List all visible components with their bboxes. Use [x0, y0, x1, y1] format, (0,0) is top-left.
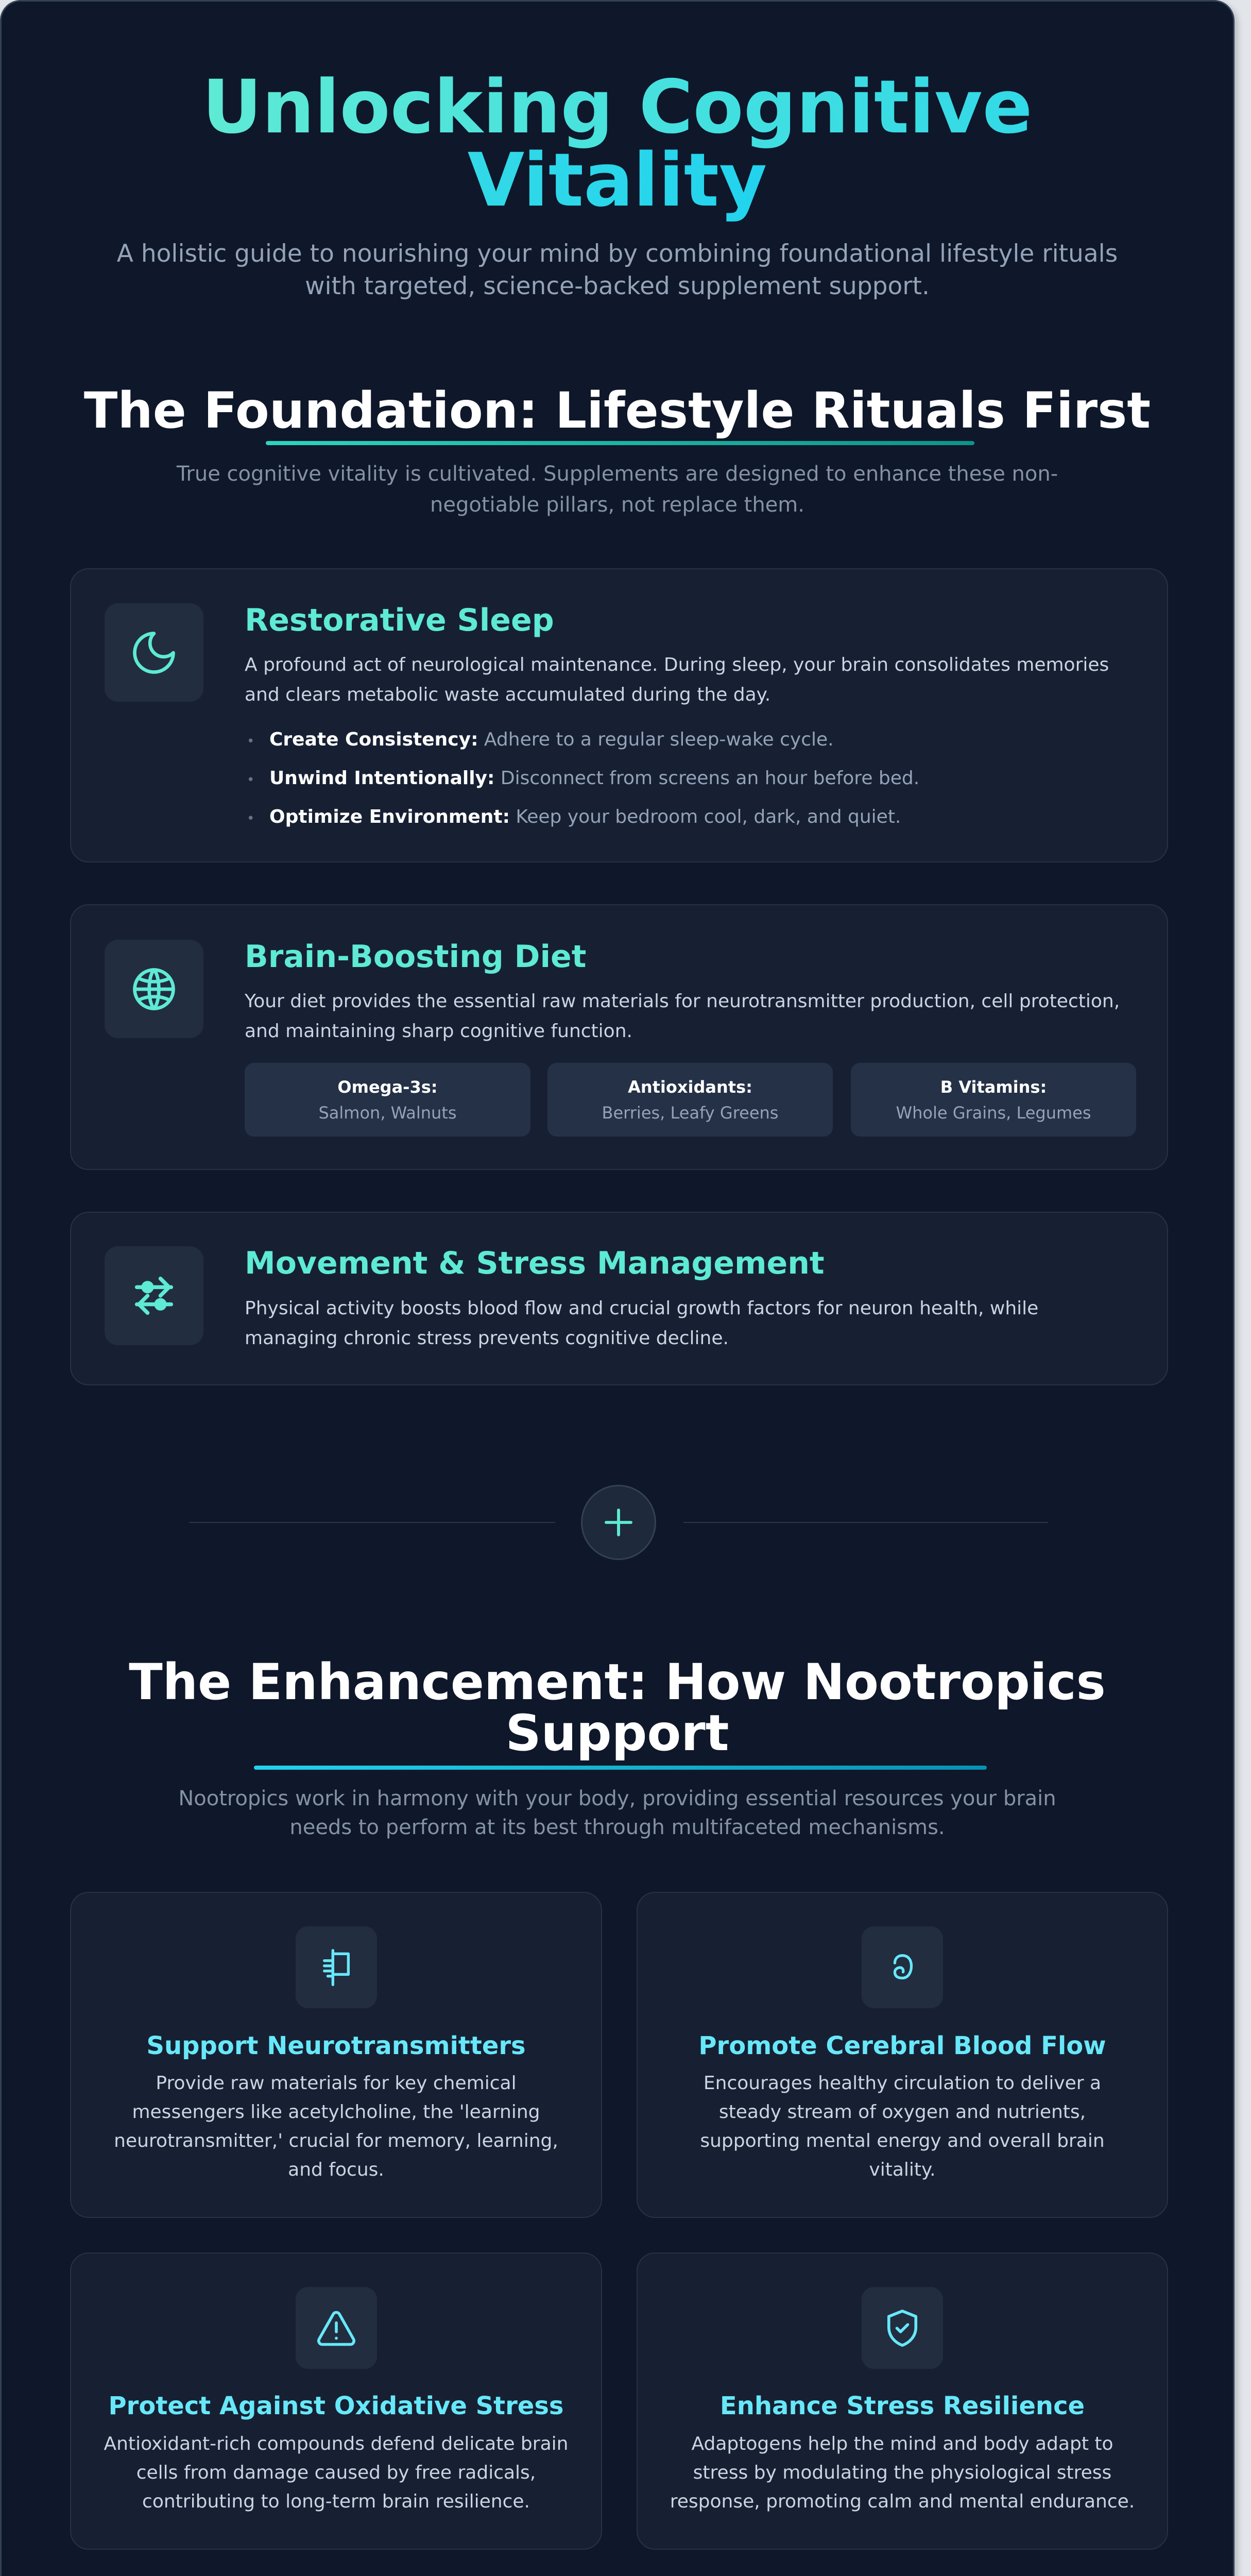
title: [202, 64, 1032, 223]
text: blood flow: [700, 2073, 1105, 2180]
heading: enhancement: The Enhancement: How Nootropics: [129, 1653, 1106, 1711]
subtitle: A holistic guide to nourishing your mind by combining foundational lifestyle rituals: [117, 240, 1118, 268]
text: blood flow: supporting mental energy and overall brain: [700, 2130, 1105, 2151]
nutrient box: b vitamins: B Vitamins:: [940, 1077, 1047, 1097]
title: Unlocking Cognitive: [202, 64, 1032, 150]
panel: support neurotransmitters: [70, 1892, 602, 2218]
subtitle: [117, 240, 1118, 300]
nutrient box: omega-3s: [245, 1063, 530, 1137]
title: resilience: Enhance Stress Resilience: [720, 2392, 1085, 2420]
bullet list: sleep tips: •: [247, 811, 254, 826]
bullet list: sleep tips: •: [247, 734, 254, 749]
icon: plus divider: [581, 1485, 656, 1560]
title: Vitality: [468, 137, 767, 223]
nutrient box: omega-3s: Omega-3s:: [337, 1077, 438, 1097]
text: sleep: [245, 654, 1109, 705]
enhancement intro text: needs to perform at its best through multifaceted mechanisms.: [289, 1816, 945, 1839]
text: blood flow: vitality.: [869, 2159, 936, 2180]
foundation intro text: negotiable pillars, not replace them.: [430, 493, 804, 517]
panel: brain-boosting diet: [70, 904, 1168, 1170]
text: blood flow: steady stream of oxygen and nutrients,: [719, 2102, 1086, 2123]
heading: movement: Movement & Stress Management: [245, 1245, 825, 1281]
text: resilience: [670, 2433, 1135, 2512]
heading: diet: Brain-Boosting Diet: [245, 939, 586, 975]
icon: sliders: [105, 1246, 203, 1345]
text: neurotransmitters: and focus.: [288, 2159, 384, 2180]
nutrient box: b vitamins: Whole Grains, Legumes: [896, 1103, 1091, 1123]
bullet list: sleep tips: •: [247, 772, 254, 788]
panel: movement & stress: [70, 1212, 1168, 1385]
subtitle: with targeted, science-backed supplement support.: [305, 272, 930, 300]
icon: chip: [296, 1926, 377, 2008]
nutrient box: antioxidants: Antioxidants:: [628, 1077, 752, 1097]
text: blood flow: Encourages healthy circulation to deliver a: [704, 2073, 1101, 2094]
panel: cerebral blood flow: [637, 1892, 1168, 2218]
text: movement: Physical activity boosts blood flow and crucial growth factors for neuron health, while: [245, 1298, 1038, 1319]
foundation intro text: True cognitive vitality is cultivated. Supplements are designed to enhance these non-: [177, 462, 1058, 486]
bullet list: sleep tips: Unwind Intentionally: Disconnect from screens an hour before bed.: [269, 768, 919, 789]
heading: sleep: Restorative Sleep: [245, 602, 554, 638]
enhancement intro text: Nootropics work in harmony with your body, providing essential resources your brain: [178, 1787, 1056, 1810]
text: oxidative: cells from damage caused by free radicals,: [136, 2462, 536, 2483]
title: neurotransmitters: Support Neurotransmitters: [146, 2031, 526, 2060]
text: sleep: and clears metabolic waste accumulated during the day.: [245, 684, 770, 705]
icon: moon: [105, 603, 203, 702]
icon: shield check: [862, 2287, 943, 2369]
title: oxidative: Protect Against Oxidative Stress: [108, 2392, 563, 2420]
nutrient box: antioxidants: [547, 1063, 833, 1137]
text: diet: [245, 991, 1120, 1042]
bullet list: sleep tips: [247, 729, 919, 827]
heading: foundation: The Foundation: Lifestyle Rituals First: [84, 382, 1151, 439]
nutrient box: b vitamins: [851, 1063, 1136, 1137]
text: resilience: Adaptogens help the mind and body adapt to: [691, 2433, 1113, 2454]
text: diet: Your diet provides the essential raw materials for neurotransmitter production, cell protection,: [245, 991, 1120, 1012]
text: movement: managing chronic stress prevents cognitive decline.: [245, 1328, 729, 1349]
text: sleep: A profound act of neurological maintenance. During sleep, your brain consolidates memories: [245, 654, 1109, 675]
text: neurotransmitters: neurotransmitter,' crucial for memory, learning,: [114, 2130, 558, 2151]
enhancement intro text: [178, 1787, 1056, 1839]
underline: enhancement: [254, 1766, 987, 1770]
panel: stress resilience: [637, 2252, 1168, 2550]
bullet list: sleep tips: Create Consistency: Adhere to a regular sleep-wake cycle.: [269, 729, 834, 750]
text: movement: [245, 1298, 1038, 1349]
nutrient box: omega-3s: Salmon, Walnuts: [318, 1103, 457, 1123]
panel: restorative sleep: [70, 568, 1168, 862]
icon: drop swirl: [862, 1926, 943, 2008]
bullet list: sleep tips: Optimize Environment: Keep your bedroom cool, dark, and quiet.: [269, 806, 901, 827]
text: diet: and maintaining sharp cognitive function.: [245, 1021, 632, 1042]
title: blood flow: Promote Cerebral Blood Flow: [698, 2031, 1106, 2060]
icon: warning: [296, 2287, 377, 2369]
text: oxidative: Antioxidant-rich compounds defend delicate brain: [104, 2433, 568, 2454]
heading: enhancement: Support: [505, 1704, 729, 1762]
text: oxidative: [104, 2433, 568, 2512]
text: neurotransmitters: Provide raw materials for key chemical: [156, 2073, 517, 2094]
icon: globe: [105, 940, 203, 1038]
nutrient box: antioxidants: Berries, Leafy Greens: [602, 1103, 778, 1123]
panel: oxidative stress: [70, 2252, 602, 2550]
heading: enhancement: [129, 1653, 1106, 1762]
text: neurotransmitters: [114, 2073, 558, 2180]
foundation intro text: [176, 462, 1058, 517]
underline: foundation: [266, 441, 974, 445]
text: resilience: response, promoting calm and mental endurance.: [670, 2491, 1135, 2512]
text: neurotransmitters: messengers like acetylcholine, the 'learning: [132, 2102, 540, 2123]
text: oxidative: contributing to long-term brain resilience.: [142, 2491, 530, 2512]
text: resilience: stress by modulating the physiological stress: [693, 2462, 1111, 2483]
